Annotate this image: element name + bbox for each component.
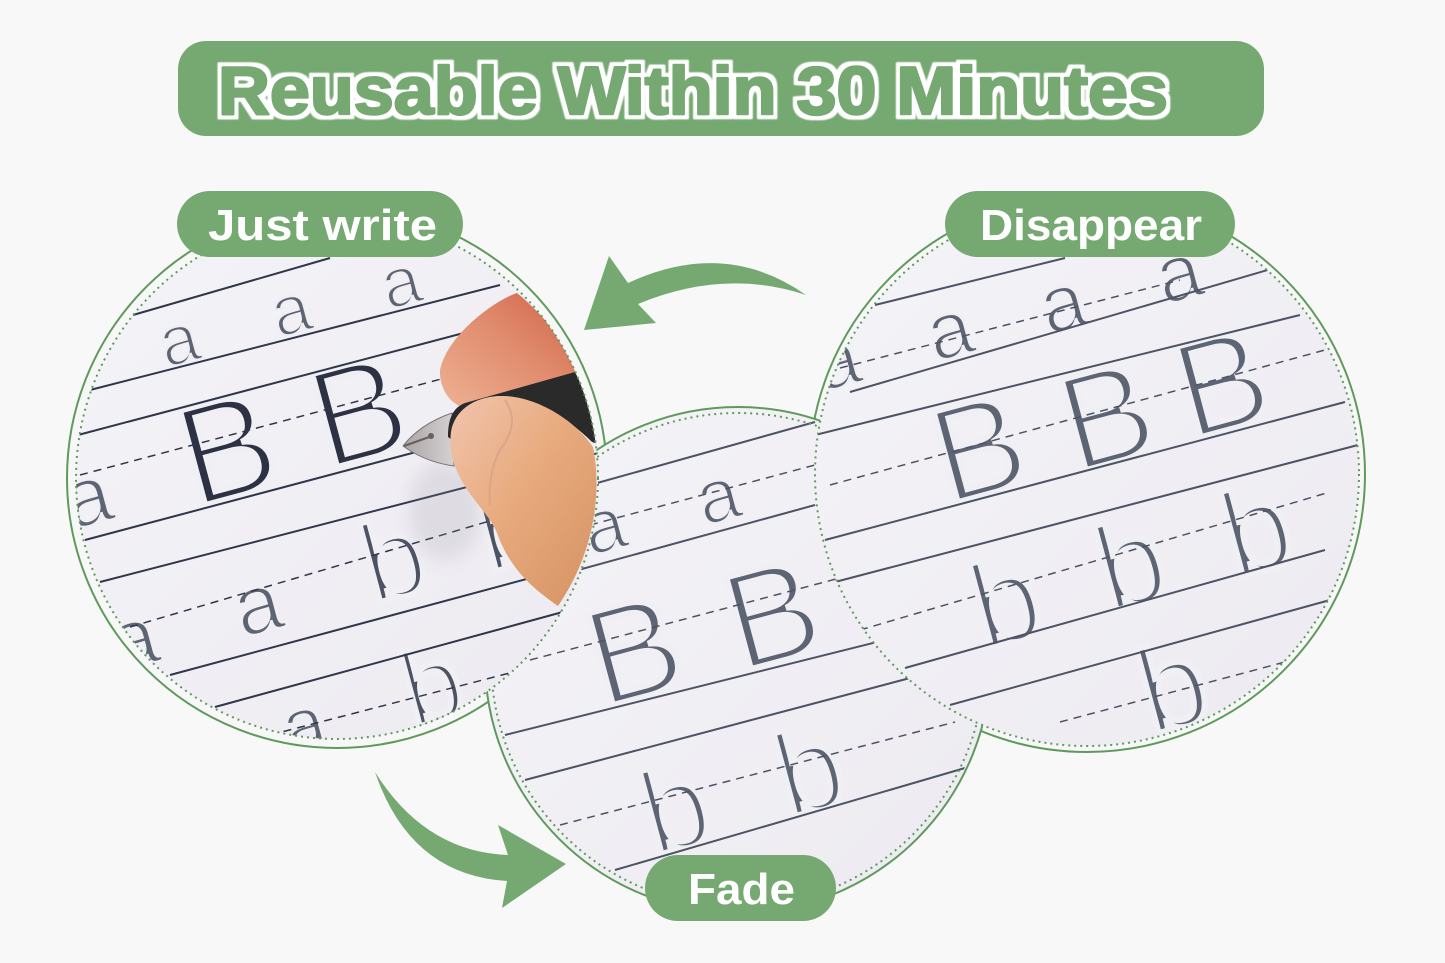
panel: disappear circle: b [1123,613,1222,760]
label: just write [177,191,463,257]
panel: just write circle: a [272,678,336,771]
panel: fade circle: B [708,528,837,701]
pen barrel [448,372,596,444]
panel: disappear circle: B [1158,298,1285,468]
panel: just write circle [75,246,599,740]
panel: fade circle: a [686,449,750,542]
arrow: just write to fade [375,772,566,908]
index finger [440,293,580,406]
panel: fade circle: b [627,737,724,881]
panel: just write circle: a [98,586,168,689]
panel: just write circle: a [262,267,320,352]
panel: disappear circle: b [1207,456,1306,603]
panel: disappear circle: a [1029,254,1096,351]
label: disappear [945,191,1235,257]
label: disappear: Disappear [980,201,1202,250]
panel: disappear circle: a [803,311,870,408]
label: just write: Just write [208,201,437,250]
illustration: hand holding pen [403,293,615,606]
icon: pen nib [403,413,454,466]
panel: just write circle: b [388,621,476,750]
panel: just write circle: B [161,360,294,538]
label: fade: Fade [688,865,795,914]
panel: disappear circle: a [1145,224,1212,321]
panel: fade circle: a [572,479,636,572]
ring: just write circle [67,208,607,748]
ring: disappear circle [809,196,1365,752]
label: fade [645,855,836,921]
panel: just write circle: a [372,239,430,324]
panel: disappear circle: b [956,528,1055,675]
panel: just write circle: a [150,297,208,382]
title banner [178,41,1264,136]
panel: just write circle: a [222,552,292,655]
thumb [450,396,596,606]
panel: disappear circle: b [1081,490,1180,637]
thumb crease [489,400,512,505]
panel: disappear circle: B [915,363,1042,533]
panel: fade circle: b [761,699,858,843]
panel: disappear circle [814,239,1360,747]
panel: just write circle: B [293,323,424,499]
panel: fade circle [485,407,991,913]
panel: disappear circle: B [1043,331,1170,501]
panel: just write circle: a [52,444,122,547]
shadow under hand [409,460,481,560]
panel: just write circle: b [463,459,555,596]
title banner: Reusable Within 30 Minutes [218,53,1168,129]
panel: just write circle: b [347,490,439,627]
panel: disappear circle: a [916,281,983,378]
panel: fade circle: B [570,564,699,737]
arrow: disappear to just write [584,256,806,330]
